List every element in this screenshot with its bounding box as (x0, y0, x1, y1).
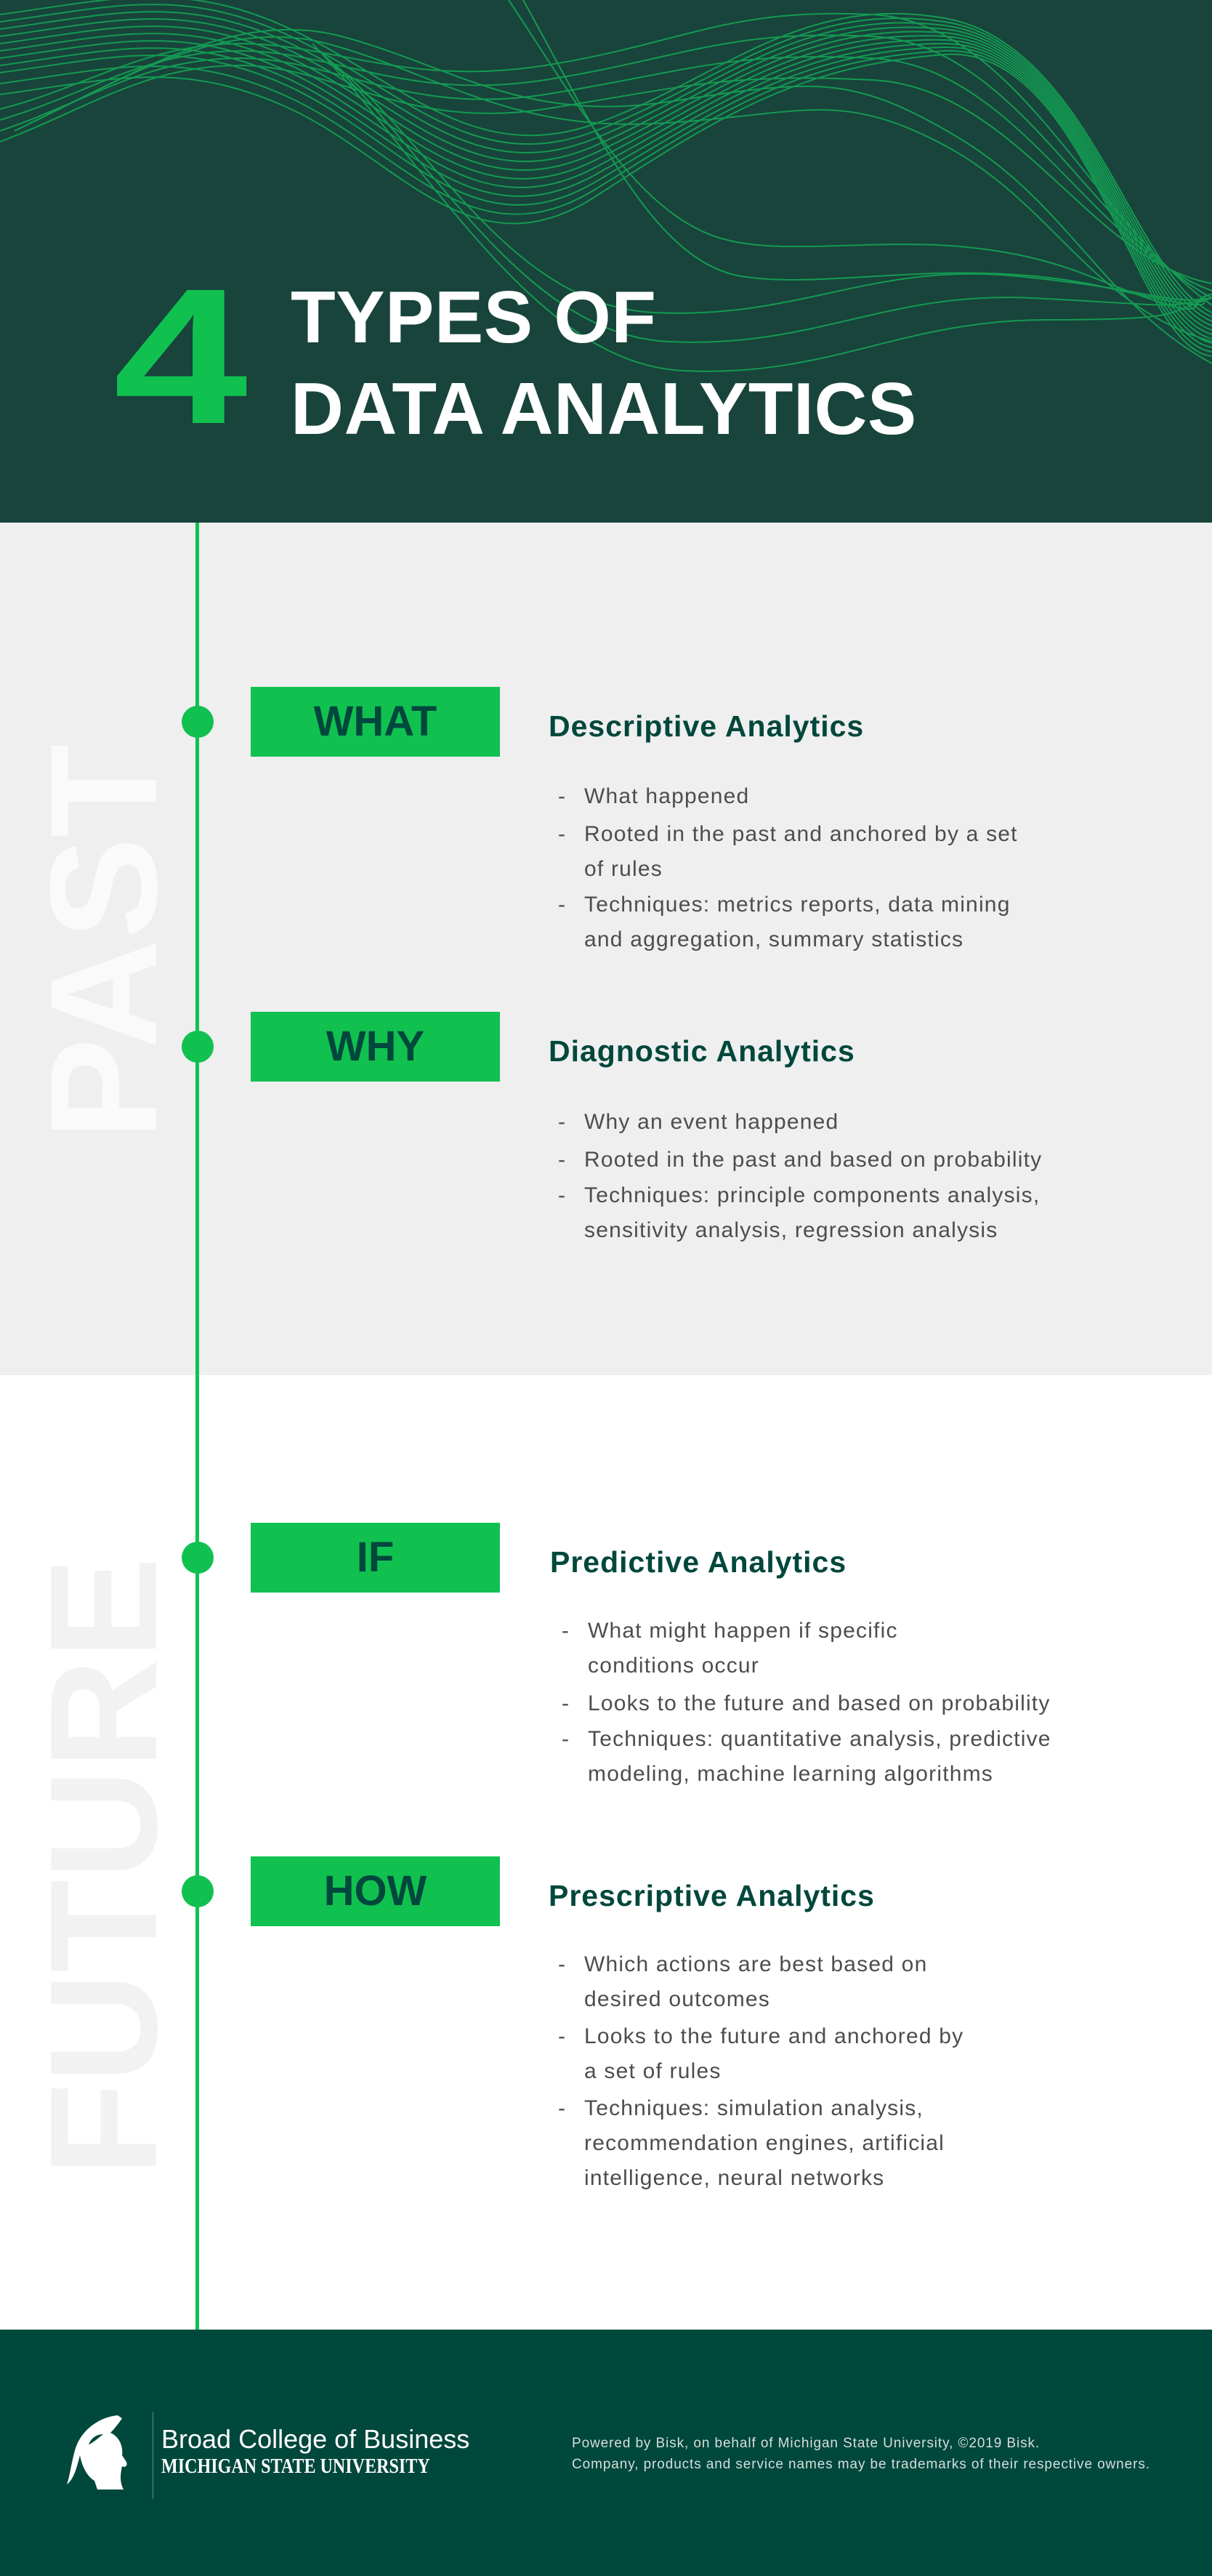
legal text (572, 2436, 1150, 2472)
label box IF (251, 1523, 500, 1593)
item: predictive (182, 1523, 1051, 1786)
label box HOW (251, 1856, 500, 1926)
label box WHAT: WHAT (314, 698, 437, 745)
bullets: Techniques: quantitative analysis, predictive (588, 1727, 1051, 1751)
dot (182, 1875, 214, 1907)
bullets: Why an event happened (584, 1110, 839, 1134)
bullets: - (558, 1952, 566, 1976)
dot (182, 706, 214, 738)
panel: past (0, 523, 1212, 1375)
label box HOW: HOW (324, 1867, 427, 1915)
item: descriptive (182, 687, 1018, 951)
header (0, 0, 1212, 523)
title text: TYPES OF (291, 277, 656, 358)
heading: Predictive Analytics (550, 1545, 847, 1579)
watermark: PAST: PAST (18, 744, 189, 1140)
bullets: Techniques: simulation analysis, (584, 2096, 924, 2120)
heading: Descriptive Analytics (549, 709, 864, 743)
legal text: Company, products and service names may be trademarks of their respective owners. (572, 2457, 1150, 2472)
legal text: Powered by Bisk, on behalf of Michigan State University, ©2019 Bisk. (572, 2436, 1040, 2451)
bullets: What happened (584, 784, 749, 808)
bullets: intelligence, neural networks (584, 2166, 884, 2190)
bullets: modeling, machine learning algorithms (588, 1762, 993, 1786)
bullets: Rooted in the past and anchored by a set (584, 822, 1018, 846)
label box WHAT (251, 687, 500, 757)
bullets: - (558, 784, 566, 808)
bullets: Looks to the future and anchored by (584, 2024, 963, 2048)
label box WHY: WHY (326, 1023, 424, 1070)
logo text: MICHIGAN STATE UNIVERSITY (161, 2455, 430, 2478)
panel: future (0, 1375, 1212, 2330)
watermark: FUTURE: FUTURE (18, 1557, 189, 2176)
bullets: - (558, 2024, 566, 2048)
bullets: a set of rules (584, 2059, 722, 2083)
bullets: - (562, 1727, 570, 1751)
bullets: of rules (584, 857, 663, 881)
bullets: Looks to the future and based on probability (588, 1691, 1051, 1715)
wave pattern (0, 0, 1212, 372)
bullets: sensitivity analysis, regression analysis (584, 1218, 998, 1242)
bullets: conditions occur (588, 1654, 759, 1678)
bullets: desired outcomes (584, 1987, 770, 2011)
dot (182, 1031, 214, 1063)
bullets: - (558, 1183, 566, 1207)
heading: Diagnostic Analytics (549, 1034, 855, 1068)
bullets: recommendation engines, artificial (584, 2131, 945, 2155)
bullets: - (558, 822, 566, 846)
logo text (161, 2424, 469, 2478)
label box IF: IF (357, 1534, 394, 1581)
title text: DATA ANALYTICS (291, 369, 917, 450)
bullets: - (558, 893, 566, 917)
big number 4: 4 (113, 249, 248, 464)
logo text: Broad College of Business (161, 2424, 469, 2454)
bullets: Which actions are best based on (584, 1952, 927, 1976)
bullets: Techniques: principle components analysis, (584, 1183, 1040, 1207)
label box WHY (251, 1012, 500, 1082)
bullets (558, 784, 1018, 951)
bullets: Techniques: metrics reports, data mining (584, 893, 1011, 917)
bullets: - (558, 1110, 566, 1134)
title (113, 249, 917, 464)
footer (0, 2330, 1212, 2576)
bullets: Rooted in the past and based on probability (584, 1148, 1042, 1172)
heading: Prescriptive Analytics (549, 1879, 875, 1912)
bullets: - (558, 1148, 566, 1172)
bullets (558, 1952, 963, 2190)
timeline line (195, 523, 199, 2330)
item: diagnostic (182, 1012, 1042, 1242)
bullets (558, 1110, 1042, 1242)
bullets (562, 1619, 1051, 1786)
bullets: - (562, 1691, 570, 1715)
bullets: What might happen if specific (588, 1619, 898, 1643)
title text (291, 277, 917, 450)
bullets: - (558, 2096, 566, 2120)
icon: spartan helmet (67, 2415, 126, 2490)
item: prescriptive (182, 1856, 963, 2190)
item: descriptive: and aggregation, summary statistics (584, 927, 963, 951)
bullets: - (562, 1619, 570, 1643)
dot (182, 1542, 214, 1574)
